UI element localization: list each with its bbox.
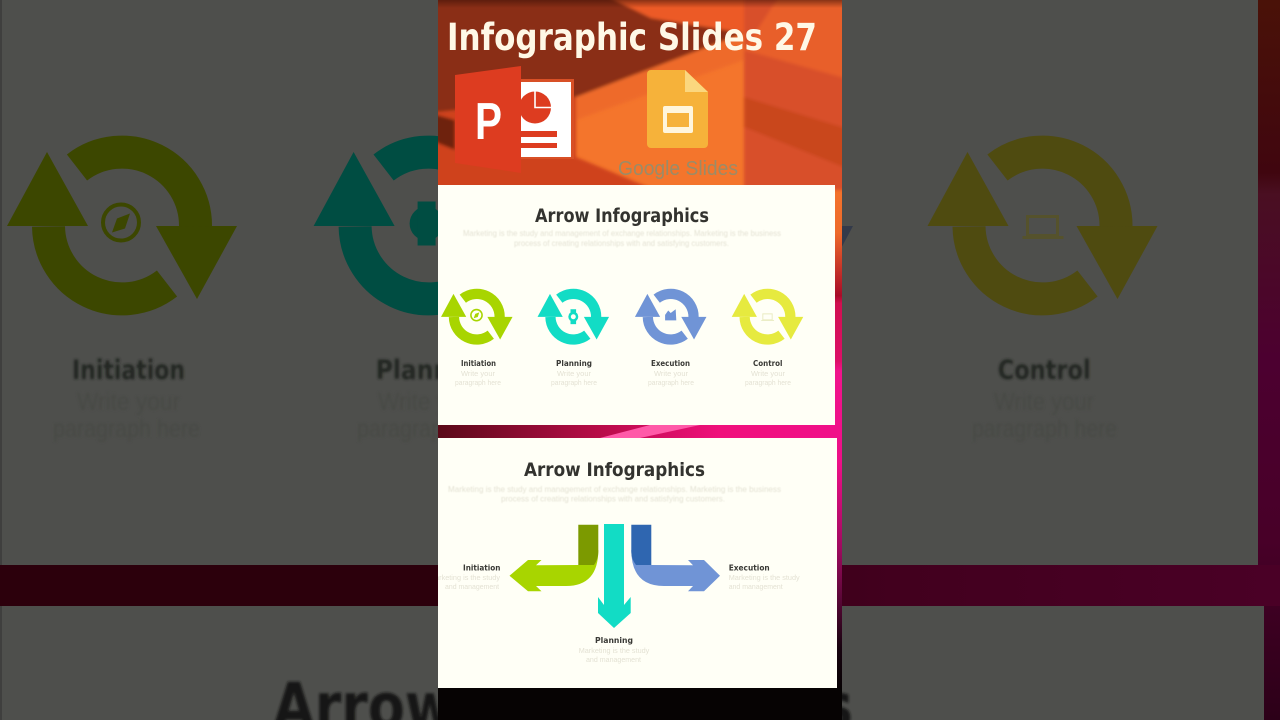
Google Slides wordmark: Google Slides xyxy=(618,158,738,180)
label: Initiation: Write your xyxy=(461,369,495,378)
label: Initiation: paragraph here xyxy=(455,378,501,387)
icon: initiation cycle arrows xyxy=(441,294,513,340)
arrow: execution, bending right xyxy=(631,525,720,591)
label: Planning: Marketing is the study xyxy=(579,646,650,655)
label: Initiation xyxy=(429,564,501,591)
label: Planning: and management xyxy=(586,655,642,664)
label: Control: Write your xyxy=(751,369,785,378)
description text: process of creating relationships with and satisfying customers. xyxy=(501,494,725,504)
banner: orange geometric background xyxy=(430,0,848,190)
label: Planning xyxy=(579,636,650,664)
backdrop text: Control: Write your xyxy=(994,388,1094,416)
central vertical video column xyxy=(429,0,842,720)
label: Initiation: Initiation xyxy=(461,359,496,368)
description text xyxy=(463,229,781,248)
icon: planning cycle arrows xyxy=(538,294,609,340)
label: Execution: Write your xyxy=(654,369,688,378)
icon: PowerPoint logo: P xyxy=(475,93,502,151)
backdrop text: Planning: paragraph here xyxy=(357,415,504,443)
backdrop text: Control xyxy=(972,355,1117,443)
backdrop icon: planning cycle arrows xyxy=(314,152,544,299)
label: Control: Control xyxy=(753,359,783,368)
label: Initiation: Initiation xyxy=(463,564,501,572)
icon: execution cycle arrows xyxy=(635,294,706,340)
label: Planning xyxy=(551,359,597,387)
icon: Google Slides logo xyxy=(647,70,708,148)
panel: bent arrows slide xyxy=(429,438,837,688)
description text xyxy=(448,485,781,504)
label: Planning: paragraph here xyxy=(551,378,597,387)
backdrop text: Control: Control xyxy=(998,355,1091,386)
heading: Arrow Infographics xyxy=(535,206,709,227)
backdrop icon: initiation cycle arrows xyxy=(7,152,237,299)
label: Execution: Execution xyxy=(729,564,770,572)
description text: Marketing is the study and management of exchange relationships. Marketing is the business xyxy=(448,485,781,494)
backdrop text: Planning: Planning xyxy=(376,355,492,386)
icon: PowerPoint logo xyxy=(455,66,574,173)
backdrop text: Initiation xyxy=(53,355,200,443)
label: Execution: paragraph here xyxy=(648,378,694,387)
label: Planning: Planning xyxy=(556,359,592,368)
heading: Arrow Infographics xyxy=(524,459,705,481)
label: Execution xyxy=(729,564,800,591)
label: Execution: and management xyxy=(729,582,784,591)
arrow: initiation, bending left xyxy=(510,525,598,591)
label: Control: paragraph here xyxy=(745,378,791,387)
backdrop text: Planning xyxy=(357,355,504,443)
arrow: planning, pointing down xyxy=(598,524,631,628)
label: Execution: Marketing is the study xyxy=(729,573,800,582)
backdrop icon: control cycle arrows xyxy=(928,152,1158,299)
label: Control xyxy=(745,359,791,387)
label: Execution: Execution xyxy=(651,359,690,368)
label: Planning: Write your xyxy=(557,369,591,378)
backdrop icon: execution arrow tip xyxy=(820,226,853,254)
backdrop text: Planning: Write your xyxy=(378,388,481,416)
description text: Marketing is the study and management of exchange relationships. Marketing is the business xyxy=(463,229,781,238)
label: Planning: Planning xyxy=(595,636,633,645)
icon: control cycle arrows xyxy=(732,294,803,340)
label: Execution xyxy=(648,359,694,387)
backdrop text: Initiation: Write your xyxy=(77,388,180,416)
description text: process of creating relationships with and satisfying customers. xyxy=(514,239,729,248)
backdrop text: Initiation: Initiation xyxy=(72,355,185,386)
panel: circular arrows slide xyxy=(438,185,835,425)
backdrop text: Control: paragraph here xyxy=(972,415,1117,443)
label: Initiation: and management xyxy=(445,582,500,591)
label: Initiation: Marketing is the study xyxy=(429,573,500,582)
label: Initiation xyxy=(455,359,501,387)
backdrop text: Initiation: paragraph here xyxy=(53,415,200,443)
